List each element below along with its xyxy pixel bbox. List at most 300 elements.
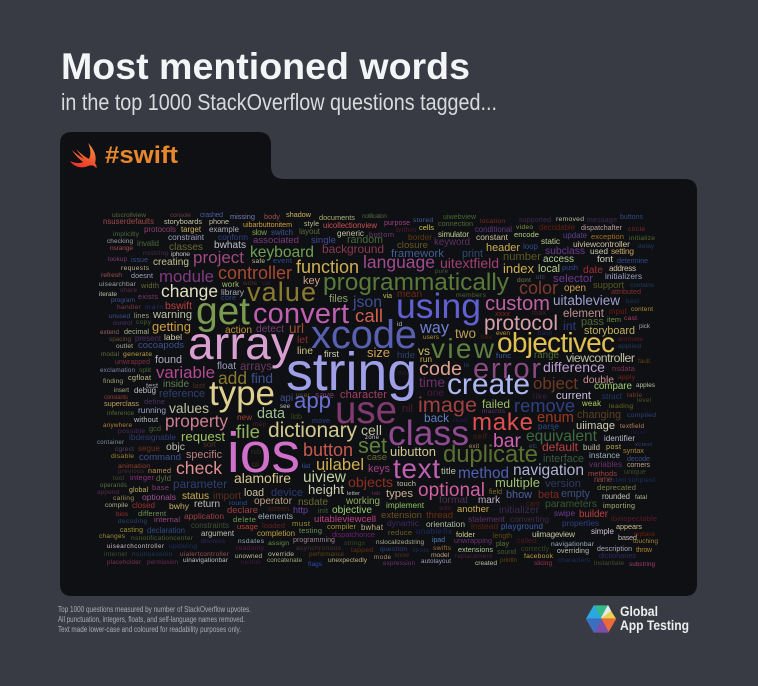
chart: word cloud: textfield [620,423,644,430]
chart: word cloud: swifts [433,545,452,552]
chart: word cloud: exclamation [100,367,135,374]
chart: word cloud: overriding [557,548,589,555]
chart: word cloud: index [503,261,534,276]
chart: word cloud: keyboard [250,244,314,261]
chart: word cloud: working [345,496,380,507]
chart: word cloud: application [184,511,224,521]
chart: word cloud: dictionary [268,419,358,442]
chart: word cloud: connection [438,219,473,228]
chart: word cloud: font [597,254,613,265]
chart: word cloud: identifier [604,434,635,443]
chart: word cloud: add [218,368,247,388]
chart: word cloud: utc [536,274,546,281]
chart: word cloud: classes [169,242,203,253]
chart: word cloud: description [597,546,632,553]
footnote: Text made lower-case and coloured for readability purposes only. [58,625,241,634]
chart: word cloud: pass [581,316,605,328]
chart: word cloud: test [146,381,158,390]
chart: word cloud: called [517,538,536,545]
chart: word cloud: http [293,505,308,515]
chart: word cloud: simplest [628,477,655,484]
chart: word cloud: nsnotificationcenter [131,535,194,542]
chart: word cloud: contains [630,282,654,289]
chart: word cloud: previous [118,469,144,475]
chart: word cloud: case [367,452,387,463]
chart: word cloud: deprecated [597,483,636,492]
chart: word cloud: loop [523,242,539,251]
chart: word cloud: apply [618,374,636,381]
chart: word cloud: object [533,374,578,393]
chart: word cloud: another [457,503,489,514]
chart: word cloud: post [606,442,621,451]
chart: word cloud: xxxx [495,309,510,318]
chart: word cloud: refresh [101,272,122,279]
word: class: class [388,413,469,453]
chart: word cloud: switch [271,228,293,237]
chart: word cloud: event [273,256,292,265]
chart: word cloud: int [563,319,577,333]
chart: word cloud: uialertcontroller [180,551,230,558]
heading: #swift: #swift [105,142,178,169]
chart: word cloud: modal [101,351,119,358]
chart: word cloud: changing [577,409,621,421]
chart: word cloud: fix [443,527,452,536]
chart: word cloud: nslocalizedstring [376,539,424,546]
chart: word cloud: let [297,335,308,346]
chart: word cloud: status [182,491,209,502]
chart: word cloud: uiimage [576,420,615,432]
chart: word cloud: struct [602,392,623,401]
chart: word cloud: language [363,252,435,272]
chart: word cloud: fatal [635,494,647,501]
chart: word cloud: iphone [171,251,190,258]
chart: word cloud: appears [616,522,642,531]
chart: word cloud: new [237,413,252,422]
chart: word cloud: builder [579,509,609,520]
chart: word cloud: dispatchonce [332,530,375,539]
chart: word cloud: spacing [109,336,131,343]
chart: word cloud: cells [419,223,434,232]
icon: Global App Testing hexagon logo [586,606,616,632]
chart: word cloud: decimal [124,327,149,336]
chart: word cloud: map [253,422,267,428]
chart: word cloud: cgfloat [128,373,151,382]
chart: word cloud: remove [514,395,575,416]
chart: word cloud: tool [113,476,124,482]
chart: word cloud: sort [203,440,217,449]
chart: word cloud: uitextfield [440,255,499,271]
chart: word cloud: split [139,367,151,374]
chart: word cloud: navigationbar [551,541,595,548]
chart: word cloud: header [486,242,520,254]
chart: word cloud: name [594,475,612,484]
chart: word cloud: height [308,482,344,497]
chart: word cloud: pick [639,323,651,330]
chart: word cloud: func [496,351,511,360]
chart: word cloud: conform [218,232,248,242]
chart: word cloud: protocols [144,225,176,234]
chart: word cloud: statement [468,514,506,524]
chart: word cloud: main [145,304,163,311]
chart: word cloud: missing [230,212,255,221]
chart: word cloud: time [419,375,445,390]
footnote [58,605,251,634]
chart: word cloud: circle [628,226,645,233]
chart: word cloud: reduce [388,528,412,537]
chart: word cloud: core [221,295,236,302]
chart: word cloud: layout [299,227,321,236]
chart: word cloud: optional [418,480,485,501]
chart: word cloud: size [367,345,390,360]
chart: word cloud: xctest [635,442,652,448]
chart: word cloud: constant [476,232,509,242]
chart: word cloud: is [464,362,469,369]
chart: word cloud: nsdates [238,538,265,545]
chart: word cloud: best [626,298,639,305]
chart: word cloud: anywhere [103,422,132,429]
chart: word cloud: change [161,281,218,301]
chart: word cloud: color [519,278,558,298]
chart: word cloud: variables [589,460,622,469]
chart: word cloud: used [590,246,608,256]
chart: word cloud: performance [309,551,345,558]
chart: word cloud: simple [591,527,615,536]
chart: word cloud: exception [591,232,624,241]
chart: word cloud: address [609,264,636,273]
chart: word cloud: property [165,411,228,431]
chart: word cloud: question [380,546,407,553]
chart: word cloud: print [462,248,483,260]
chart: word cloud: background [322,242,384,256]
chart: word cloud: cocoapods [138,340,184,351]
chart: word cloud: based [618,533,637,542]
chart: word cloud: objc [166,442,185,453]
chart: word cloud: file [236,421,260,442]
chart: word cloud: objective [332,505,372,516]
chart: word cloud: users [423,334,439,341]
chart: word cloud: double [583,375,614,386]
chart: word cloud: characters [558,557,590,564]
chart: word cloud: handler [117,304,142,311]
chart: word cloud: parameters [545,499,597,510]
icon: swift bird [70,143,97,168]
chart: word cloud: share [120,287,137,294]
chart: word cloud: ibinspectable [611,514,657,523]
chart: word cloud: expression [383,560,415,567]
chart: word cloud: uisearchcontroller [107,543,164,550]
chart: word cloud: max [532,310,546,317]
chart: word cloud: inside [163,379,189,390]
chart: word cloud: title [441,466,456,477]
chart: word cloud: loaded [262,521,285,530]
chart: word cloud: dont [517,277,531,284]
chart: word cloud: keyword [434,237,470,248]
chart: word cloud: write [242,280,257,287]
chart: word cloud: compiled [627,412,656,419]
chart: word cloud: closure [397,240,428,251]
chart: word cloud: character [340,389,387,401]
chart: word cloud: integer [130,473,155,482]
chart: word cloud: cgrect [115,446,134,453]
chart: word cloud: key [303,275,320,287]
chart: word cloud: attributed [611,287,641,296]
chart: word cloud: json [352,294,382,311]
chart: word cloud: custom [485,293,550,315]
chart: word cloud: vs [418,344,430,358]
chart: word cloud: video [516,224,533,231]
chart: word cloud: hash [538,330,552,337]
chart: word cloud: table [627,392,642,399]
chart: word cloud: apples [636,382,655,389]
chart: word cloud: last [193,381,205,390]
chart: word cloud: var [262,280,271,287]
chart: word cloud: cell [361,422,382,438]
chart: word cloud: implicitly [113,231,140,238]
chart: word cloud: uiscrollview [112,212,146,219]
chart: word cloud: function [296,257,359,277]
chart: word cloud: load [244,487,264,499]
chart: word cloud: initialize [629,235,655,242]
chart: word cloud: parameter [173,477,227,491]
chart: word cloud: declare [227,505,258,516]
chart: word cloud: equivalent [526,428,598,445]
chart: word cloud: one [427,388,444,399]
chart: word cloud: date [583,265,603,276]
chart: word cloud: even [496,330,510,337]
chart: word cloud: nil [402,403,413,415]
chart: word cloud: field [489,489,502,496]
chart: word cloud: bar [493,430,522,452]
chart: word cloud: mark [478,495,500,506]
subtitle: in the top 1000 StackOverflow questions tagged... [61,89,497,115]
chart: word cloud: width [140,281,159,290]
word: using: using [396,286,481,326]
chart: word cloud: closed [132,501,155,510]
chart: word cloud: tab [372,491,380,497]
chart: word cloud: instantiate [594,560,624,567]
chart: word cloud: play [496,541,510,548]
chart: word cloud: exists [138,294,158,301]
chart: word cloud: encode [514,230,539,239]
chart: word cloud: item [607,315,621,324]
chart: word cloud: viewcontroller [566,351,635,365]
chart: word cloud: constraint [168,232,205,242]
chart: word cloud: types [386,488,413,500]
chart: word cloud: segue [138,444,161,453]
chart: word cloud: navigation [513,462,584,479]
chart: word cloud: uilabel [316,455,364,474]
chart: word cloud: round [229,500,247,507]
chart: word cloud: uiview [303,469,347,486]
chart: word cloud: generic [337,229,364,238]
chart: word cloud: storyboards [164,217,202,226]
chart: word cloud: changes [99,533,125,540]
chart: word cloud: hide [397,350,415,361]
chart: word cloud: mean [397,289,422,300]
chart: word cloud: define [144,397,165,406]
chart: word cloud: screen [268,506,289,513]
chart: word cloud: difference [543,359,605,375]
chart: word cloud: outlet [116,343,133,350]
chart: word cloud: facebook [524,553,554,560]
chart: word cloud: thread [426,510,453,521]
word: error: error [473,353,541,385]
chart: word cloud: local [538,263,560,275]
chart: word cloud: specific [186,449,223,461]
chart: word cloud: device [271,487,303,499]
chart: word cloud: library [221,287,245,297]
chart: word cloud: decodable [539,223,575,232]
chart: word cloud: casting [120,527,143,534]
panel: folder-shaped word cloud background [60,132,697,596]
chart: word cloud: data [257,406,285,422]
chart: word cloud: app [294,388,331,413]
chart: word cloud: static [541,237,560,246]
chart: word cloud: detect [256,324,284,335]
chart: word cloud: run [420,355,432,364]
chart: word cloud: multiple [495,475,540,490]
chart: word cloud: declaration [147,526,185,535]
chart: word cloud: variable [156,363,215,382]
chart: word cloud: constraints [191,521,229,530]
chart: word cloud: empty [561,488,591,500]
chart: word cloud: letter [347,491,360,497]
chart: word cloud: doesnt [131,271,153,280]
chart: word cloud: extension [381,510,422,521]
chart: word cloud: this [398,370,408,377]
chart: word cloud: created [475,560,497,567]
chart: word cloud: lines [134,313,150,320]
chart: word cloud: ui [252,459,259,469]
chart: word cloud: optionals [142,492,176,502]
chart: word cloud: way [419,319,450,337]
chart: word cloud: two [455,326,476,341]
chart: word cloud: fault [638,358,650,365]
word: make: make [472,409,533,436]
chart: word cloud: api [280,393,293,404]
logo wordmark: App Testing [620,617,689,633]
chart: word cloud: uiviewcontroller [573,239,630,249]
chart: word cloud: bhow [506,489,532,501]
word: get: get [196,290,250,333]
chart: word cloud: etc [529,444,537,450]
chart: word cloud: importing [603,501,635,510]
chart: word cloud: must [292,519,311,528]
chart: word cloud: getting [152,319,191,334]
chart: word cloud: assign [268,540,289,547]
chart: word cloud: failed [482,398,510,411]
chart: word cloud: elements [258,511,293,521]
chart: word cloud: supported [519,217,551,224]
chart: word cloud: arrays [240,361,272,373]
chart: word cloud: auto [439,505,451,512]
chart: word cloud: compiler [327,522,356,531]
chart: word cloud: tests [413,547,429,554]
chart: word cloud: uitableviewcell [314,514,376,525]
chart: word cloud: dispatchafter [581,225,623,232]
chart: word cloud: internal [154,515,180,524]
chart: word cloud: methods [588,469,617,478]
chart: word cloud: tapped [351,547,373,554]
chart: word cloud: files [329,293,348,305]
chart: word cloud: url [289,321,304,336]
chart: word cloud: iterate [99,291,117,298]
chart: word cloud: bwhy [169,501,190,511]
chart: word cloud: instance [589,450,620,460]
chart: word cloud: append [97,489,119,496]
chart: word cloud: replace [634,531,655,538]
chart: word cloud: command [139,452,181,463]
chart: word cloud: safe [252,258,265,265]
chart: word cloud: controller [218,263,292,283]
chart: word cloud: storyboard [584,325,635,337]
chart: word cloud: work [221,280,239,289]
chart: word cloud: swipe [554,509,575,518]
chart: word cloud: named [148,466,171,475]
word: programmatically: programmatically [323,269,510,296]
chart: word cloud: bwhats [214,240,246,251]
chart: word cloud: simulator [438,230,469,239]
chart: word cloud: list [302,464,310,470]
chart: word cloud: lookup [108,256,127,263]
chart: word cloud: testing [299,526,322,535]
chart: word cloud: unwrapped [115,359,150,366]
chart: word cloud: uicollectionview [323,221,377,230]
chart: word cloud: asynchronous [296,545,342,552]
chart: word cloud: label [164,332,182,342]
chart: word cloud: mode [374,554,392,561]
chart: word cloud: usage [237,522,258,531]
chart: word cloud: conditional [475,225,512,234]
chart: word cloud: touching [633,538,658,545]
chart: word cloud: uibarbuttonitem [243,221,292,229]
chart: word cloud: uiwebview [443,214,477,221]
chart: word cloud: action [225,325,252,336]
title: Most mentioned words [61,46,470,87]
chart: word cloud: associated [253,235,299,246]
chart: word cloud: warning [152,309,192,321]
chart: word cloud: syntax [623,446,644,455]
chart: word cloud: properties [562,518,599,528]
chart: word cloud: gcd [149,424,161,433]
chart: word cloud: module [159,267,214,286]
chart: word cloud: operands [100,483,127,489]
chart: word cloud: strings [344,540,366,547]
chart: word cloud: version [545,478,581,490]
word: type: type [209,374,275,413]
chart: word cloud: phone [209,217,229,226]
chart: word cloud: selector [553,273,593,285]
chart: word cloud: issue [131,257,148,264]
chart: word cloud: enum [537,410,574,426]
chart: word cloud [97,210,658,568]
chart: word cloud: protocol [484,312,558,335]
chart: word cloud: extend [100,329,120,336]
chart: word cloud: button [303,440,353,460]
chart: word cloud: concatenate [267,557,302,564]
chart: word cloud: move [312,418,330,425]
chart: word cloud: neither [241,559,261,566]
chart: word cloud: touch [397,479,416,488]
chart: word cloud: zone [365,435,380,441]
chart: word cloud: alamofire [234,470,291,486]
chart: word cloud: notification [362,213,387,220]
chart: word cloud: default [542,440,579,454]
chart: word cloud: beta [538,489,559,501]
chart: word cloud: style [304,221,319,228]
footnote: All punctuation, integers, floats, and self-language names removed. [58,615,245,624]
chart: word cloud: target [181,225,202,234]
